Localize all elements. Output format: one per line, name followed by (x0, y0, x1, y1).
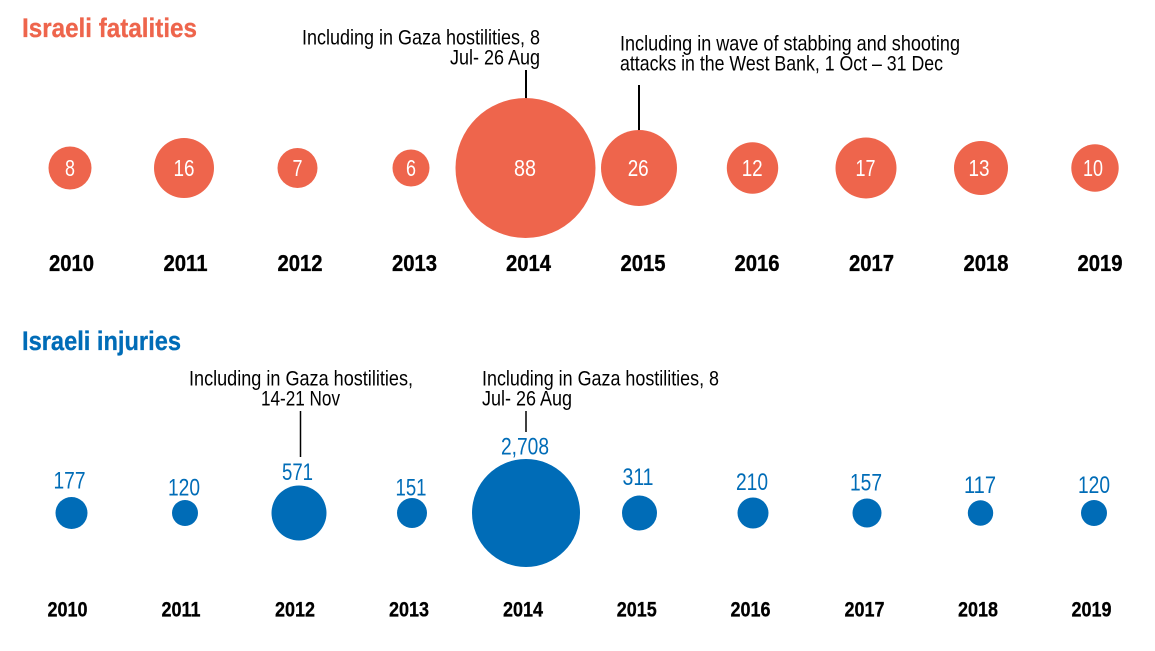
bubble chart: fatalities by year: 6 (406, 155, 416, 181)
heading: Israeli fatalities: Israeli fatalities (22, 13, 197, 43)
callout: 2014 injuries note: Including in Gaza hostilities, 8 (482, 367, 719, 390)
year axis: injuries: 2018 (958, 598, 998, 622)
bubble chart: fatalities by year: 26 (628, 155, 649, 181)
year axis: injuries: 2013 (389, 598, 429, 622)
year axis: fatalities: 2018 (964, 250, 1009, 276)
year axis: injuries: 2017 (844, 598, 884, 622)
year axis: fatalities: 2019 (1078, 250, 1122, 276)
year axis: fatalities: 2014 (506, 250, 551, 276)
bubble chart: fatalities by year: 10 (1083, 155, 1103, 181)
bubble chart: injuries by year: 120 (1078, 472, 1110, 499)
bubble chart: injuries by year: 157 (850, 470, 882, 496)
callout: 2012 injuries note: 14-21 Nov (261, 387, 340, 410)
callout: 2012 injuries note: Including in Gaza hostilities, (189, 367, 413, 390)
callout: 2015 fatalities note (620, 32, 960, 131)
bubble chart: injuries by year: 120 (168, 474, 200, 502)
bubble chart: fatalities by year: 7 (292, 155, 302, 181)
callout: 2014 injuries note: Jul- 26 Aug (482, 387, 572, 410)
year axis: fatalities: 2010 (49, 250, 94, 276)
year axis: injuries: 2010 (48, 598, 88, 622)
bubble chart: fatalities by year: 88 (514, 155, 536, 181)
heading: Israeli injuries: Israeli injuries (22, 326, 181, 356)
callout: 2014 injuries note (482, 367, 719, 432)
year axis: injuries: 2014 (503, 598, 543, 622)
year axis: fatalities: 2015 (620, 250, 666, 276)
year axis: fatalities: 2012 (278, 250, 322, 276)
callout: 2014 fatalities note: Jul- 26 Aug (450, 46, 540, 69)
year axis: injuries: 2012 (275, 598, 315, 622)
callout: 2014 fatalities note (302, 26, 540, 99)
year axis: injuries (48, 598, 1112, 622)
callout: 2015 fatalities note: Including in wave of stabbing and shooting (620, 32, 960, 55)
bubble chart: injuries by year: 210 (736, 469, 768, 496)
bubble chart: fatalities by year: 12 (742, 155, 763, 181)
year axis: fatalities: 2013 (392, 250, 437, 276)
year axis: fatalities: 2011 (164, 250, 208, 276)
year axis: injuries: 2019 (1072, 598, 1112, 622)
bubble chart: injuries by year: 151 (396, 474, 426, 502)
bubble chart: fatalities by year (48, 98, 1119, 238)
bubble chart: fatalities by year: 13 (968, 155, 990, 181)
year axis: injuries: 2016 (730, 598, 770, 622)
callout: 2012 injuries note (189, 367, 413, 457)
bubble chart: injuries by year: 117 (964, 472, 996, 499)
year axis: fatalities: 2017 (849, 250, 894, 276)
bubble chart: fatalities by year: 17 (856, 155, 876, 181)
callout: 2015 fatalities note: attacks in the West Bank, 1 Oct – 31 Dec (620, 52, 943, 75)
year axis: fatalities (49, 250, 1122, 276)
bubble chart: injuries by year (54, 434, 1110, 567)
bubble chart: injuries by year: 311 (622, 464, 654, 491)
bubble chart: fatalities by year: 16 (174, 155, 194, 181)
bubble chart: injuries by year: 2,708 (501, 434, 549, 460)
year axis: injuries: 2011 (162, 598, 201, 622)
year axis: fatalities: 2016 (734, 250, 780, 276)
bubble chart: injuries by year: 571 (282, 459, 313, 486)
callout: 2014 fatalities note: Including in Gaza hostilities, 8 (302, 26, 540, 49)
year axis: injuries: 2015 (617, 598, 657, 622)
bubble chart: injuries by year: 177 (54, 468, 86, 494)
bubble chart: fatalities by year: 8 (65, 155, 75, 181)
